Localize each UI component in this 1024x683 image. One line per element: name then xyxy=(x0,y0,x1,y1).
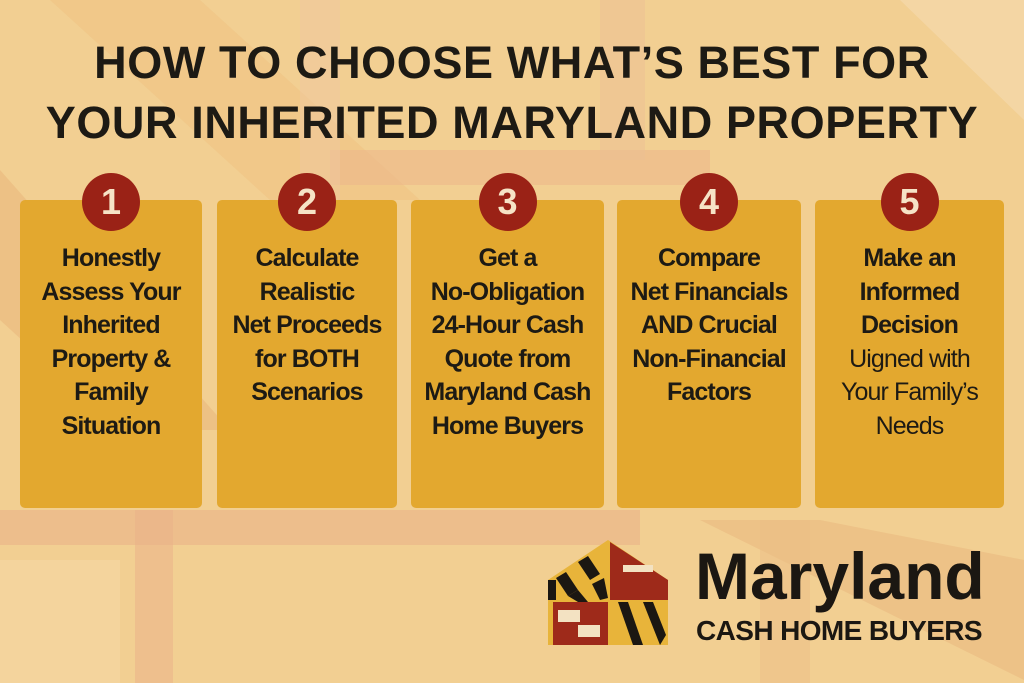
card 4 text: Non-Financial xyxy=(632,344,786,372)
title: YOUR INHERITED MARYLAND PROPERTY xyxy=(46,97,978,148)
card 1 text: Situation xyxy=(62,412,160,440)
card 2 xyxy=(217,200,397,508)
card 4 text xyxy=(631,244,788,406)
card 4 text: Net Financials xyxy=(631,278,787,306)
logo xyxy=(548,539,985,646)
badge 2: 2 xyxy=(297,181,317,222)
tagline: CASH HOME BUYERS xyxy=(696,615,982,646)
card 3 text: Get a xyxy=(478,244,537,272)
card 5 text: Needs xyxy=(876,412,943,440)
badge 1 xyxy=(82,173,140,231)
title xyxy=(46,37,978,148)
card 5 text: Uigned with xyxy=(849,344,970,372)
card 1 xyxy=(20,200,202,508)
card 3 text: No-Obligation xyxy=(431,278,584,306)
card 4 text: Factors xyxy=(667,378,751,406)
badge 4 xyxy=(680,173,738,231)
card 2 text: Net Proceeds xyxy=(232,311,382,339)
title: HOW TO CHOOSE WHAT’S BEST FOR xyxy=(94,37,930,88)
card 1 text xyxy=(41,244,182,440)
badge 2 xyxy=(278,173,336,231)
card 1 text: Honestly xyxy=(62,244,160,272)
badge 3: 3 xyxy=(497,181,518,222)
card 1 text: Inherited xyxy=(62,311,160,339)
card 1 text: Property & xyxy=(52,344,170,372)
card 4 text: Compare xyxy=(658,244,760,272)
card 3 text: 24-Hour Cash xyxy=(432,311,583,339)
badge 5 xyxy=(880,173,938,231)
badge 1: 1 xyxy=(101,181,121,222)
card 3 xyxy=(411,200,604,508)
card 5 text: Informed xyxy=(860,278,959,306)
card 2 text: Calculate xyxy=(255,244,359,272)
card 5 text xyxy=(841,244,978,440)
card 1 text: Assess Your xyxy=(41,278,181,306)
brand name: Maryland xyxy=(695,539,985,613)
card 3 text: Quote from xyxy=(445,344,570,372)
card 2 text: Realistic xyxy=(260,278,354,306)
card 5 text: Make an xyxy=(863,244,956,272)
card 5 text: Decision xyxy=(861,311,958,339)
card 2 text xyxy=(232,244,382,406)
card 5 xyxy=(815,200,1004,508)
card 5 text: Your Family’s xyxy=(841,378,978,406)
badge 5: 5 xyxy=(899,181,920,222)
card 3 text xyxy=(424,244,591,440)
card 1 text: Family xyxy=(74,378,148,406)
card 4 xyxy=(617,200,801,508)
badge 3 xyxy=(478,173,536,231)
badge 4: 4 xyxy=(699,181,719,222)
icon: flag house xyxy=(548,540,668,645)
card 3 text: Home Buyers xyxy=(432,412,583,440)
card 2 text: Scenarios xyxy=(251,378,363,406)
card 3 text: Maryland Cash xyxy=(424,378,591,406)
card 4 text: AND Crucial xyxy=(641,311,777,339)
card 2 text: for BOTH xyxy=(255,344,359,372)
